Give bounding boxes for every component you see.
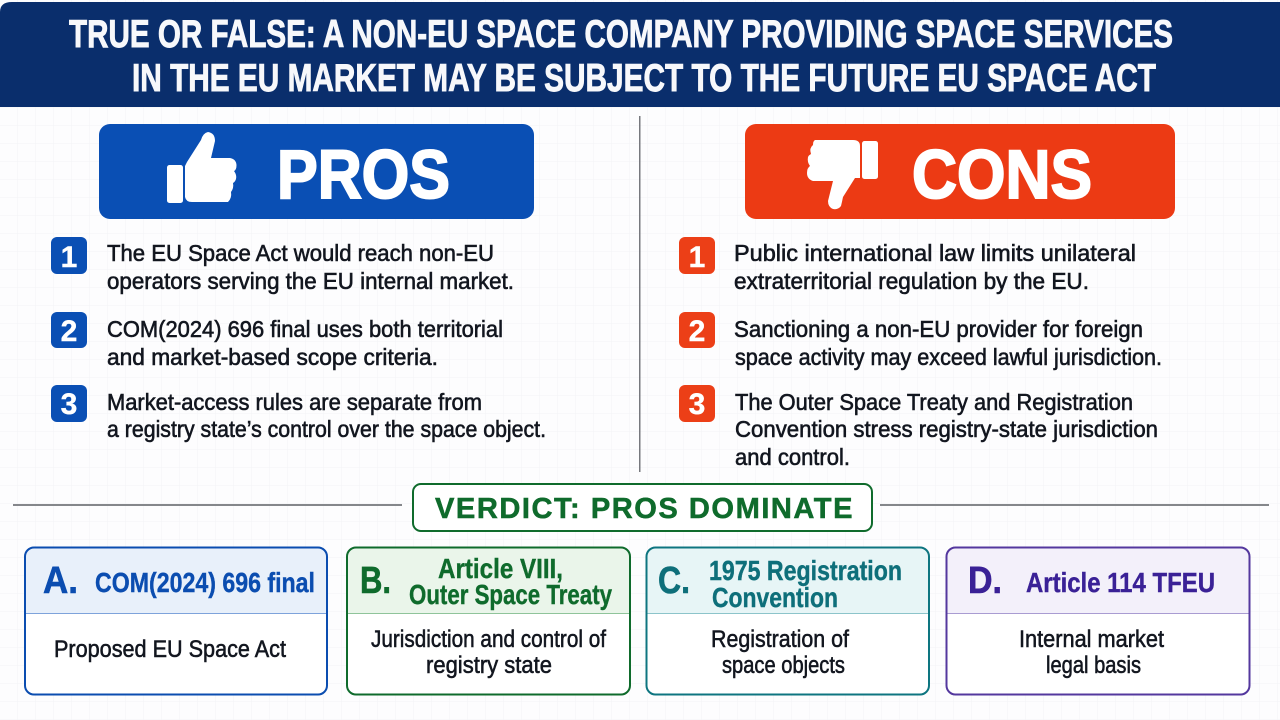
card A: A. [43,560,78,602]
cons point 1: extraterritorial regulation by the EU. [734,268,1089,294]
cons point 1 [679,237,1136,294]
card A [25,548,327,694]
card C: Registration of [711,626,849,653]
pros point 1: 1 [61,241,77,274]
card B: Article VIII, [438,553,563,584]
card B: Outer Space Treaty [409,579,612,610]
icon: thumbs down [807,140,878,209]
title text [69,13,1173,100]
card B: registry state [426,652,552,679]
verdict [13,484,1269,531]
cons point 1: 1 [689,241,705,274]
card B: Jurisdiction and control of [371,626,606,653]
pros point 2: and market-based scope criteria. [107,344,438,370]
title banner [0,2,1280,107]
cons point 3: The Outer Space Treaty and Registration [735,389,1133,415]
card A: COM(2024) 696 final [95,567,315,598]
cons point 1: Public international law limits unilateral [734,240,1136,266]
pros point 3 [51,385,546,442]
pros point 3: a registry state’s control over the space object. [107,416,546,442]
pros point 1 [51,237,514,294]
panel: cons [679,124,1175,470]
pros point 2 [51,312,503,370]
cons point 3: Convention stress registry-state jurisdiction [735,416,1158,442]
cons header: CONS [912,136,1092,213]
cons point 2 [679,312,1162,370]
card C: 1975 Registration [709,555,902,586]
pros point 2: COM(2024) 696 final uses both territorial [107,316,503,342]
card D: Article 114 TFEU [1026,567,1215,598]
cons point 2: 2 [689,315,705,348]
card D: Internal market [1019,626,1164,653]
pros header [99,124,534,219]
cons header [745,124,1175,219]
pros point 3: Market-access rules are separate from [107,389,482,415]
cons point 2: space activity may exceed lawful jurisdiction. [735,344,1162,370]
card C [646,548,929,694]
card C: space objects [722,652,845,679]
card B: B. [360,560,391,602]
cons point 3: and control. [735,444,850,470]
pros point 1: operators serving the EU internal market. [107,268,514,294]
cons point 2: Sanctioning a non-EU provider for foreign [734,316,1143,342]
card B [347,548,630,694]
pros header: PROS [277,136,450,213]
verdict: VERDICT: PROS DOMINATE [435,493,854,525]
card D [946,548,1250,694]
pros point 2: 2 [61,315,77,348]
card A: Proposed EU Space Act [54,636,286,663]
card C: Convention [712,582,838,613]
icon: thumbs up [167,132,236,203]
pros point 1: The EU Space Act would reach non-EU [107,240,494,266]
panel: pros [51,124,546,442]
card D: D. [968,560,1002,602]
center divider [639,116,640,472]
card D: legal basis [1046,652,1141,679]
cons point 3: 3 [689,388,705,421]
card C: C. [658,560,690,602]
cons point 3 [679,385,1158,470]
pros point 3: 3 [61,388,77,421]
